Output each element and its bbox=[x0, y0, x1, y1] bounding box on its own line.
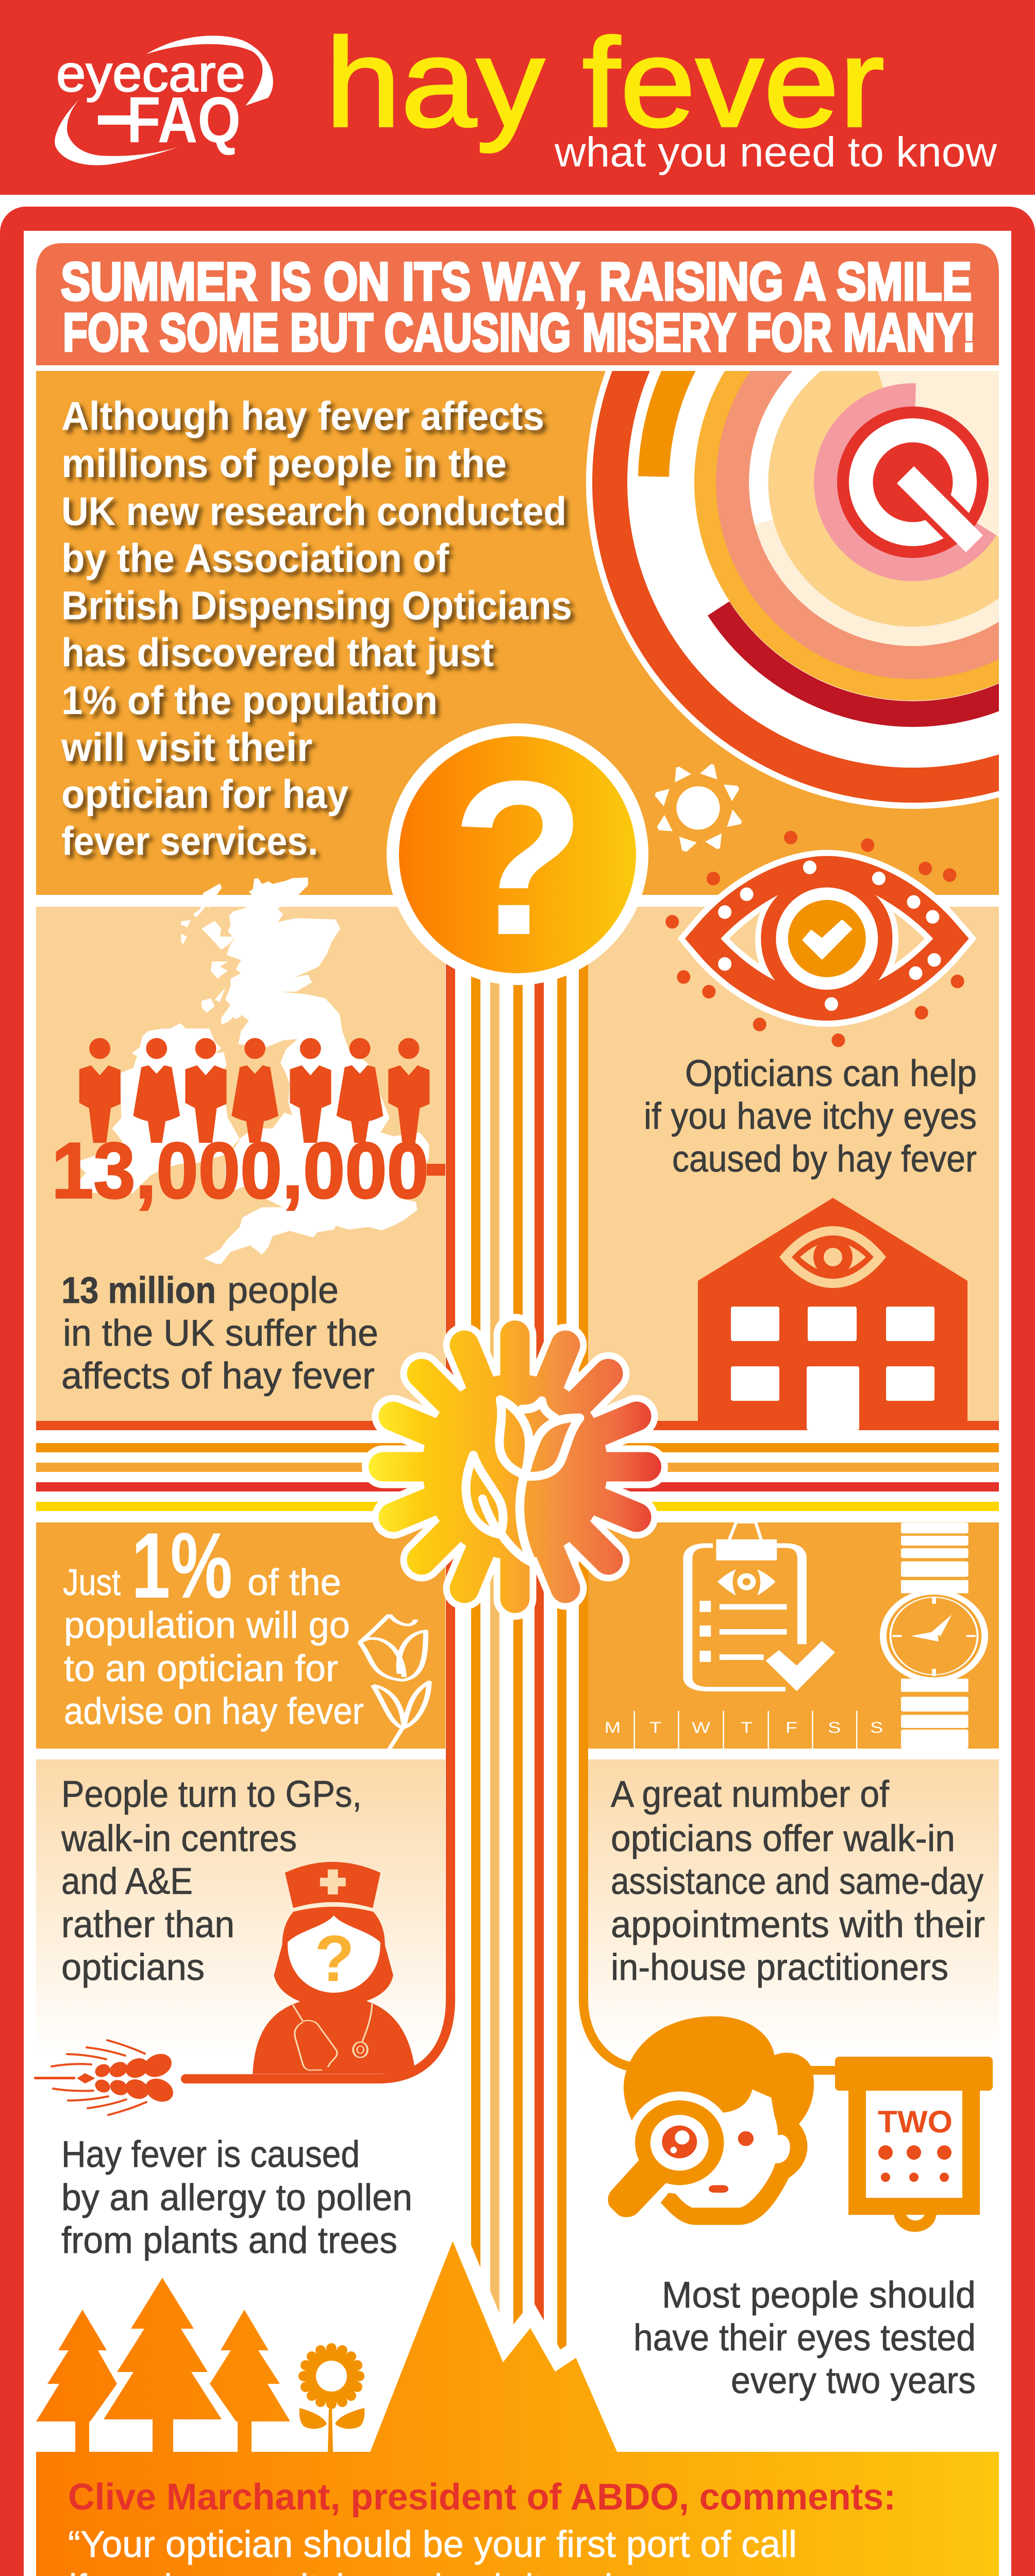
vertical stripes bbox=[186, 958, 630, 2370]
text: 13 million: 13 million bbox=[61, 1270, 216, 1311]
intro paragraph: will visit their bbox=[61, 724, 312, 770]
text: just 1%: Just bbox=[63, 1562, 121, 1603]
title: hay fever bbox=[325, 12, 884, 153]
people row bbox=[79, 1038, 429, 1143]
icon: head with magnifying glass bbox=[608, 2016, 814, 2225]
intro paragraph: optician for hay bbox=[61, 771, 348, 817]
text: people turn to GPs: rather than bbox=[61, 1904, 235, 1945]
trees bbox=[36, 2278, 290, 2452]
question mark badge bbox=[387, 723, 648, 985]
UK map bbox=[75, 877, 429, 1264]
quote text: “Your optician should be your first port of call bbox=[68, 2524, 797, 2565]
icon: eye chart bbox=[835, 2057, 993, 2232]
text: people turn to GPs: People turn to GPs, bbox=[61, 1774, 362, 1815]
icon: sunflower bbox=[299, 2348, 364, 2452]
text: hay fever is caused: by an allergy to pollen bbox=[61, 2177, 412, 2218]
days of the week: T bbox=[649, 1719, 661, 1737]
text: people turn to GPs bbox=[61, 1774, 362, 1988]
text: walk-in assistance: in-house practitioners bbox=[611, 1947, 948, 1988]
text: 13 million: people bbox=[227, 1270, 339, 1311]
days of the week: S bbox=[870, 1719, 883, 1737]
text: people turn to GPs: and A&E bbox=[61, 1861, 193, 1902]
text: 13 million: affects of hay fever bbox=[61, 1355, 375, 1397]
icon: sun and eye bbox=[655, 764, 977, 1047]
connector bar bbox=[427, 1164, 447, 1176]
header band bbox=[0, 0, 1035, 195]
text: walk-in assistance: opticians offer walk-in bbox=[611, 1818, 955, 1859]
intro paragraph: by the Association of bbox=[61, 535, 449, 581]
days of the week: M bbox=[605, 1719, 621, 1737]
days of the week: T bbox=[741, 1719, 753, 1737]
icon: wheat bbox=[34, 2040, 177, 2115]
section 2 background bbox=[36, 907, 999, 1421]
target rings with Q logo bbox=[586, 371, 999, 809]
text: opticians can help: Opticians can help bbox=[685, 1053, 977, 1094]
icon: tulip bbox=[466, 1400, 580, 1563]
question mark badge: ? bbox=[452, 735, 586, 981]
logo: eyecare FAQ: FAQ bbox=[127, 83, 241, 156]
days of the week bbox=[605, 1711, 883, 1749]
intro paragraph: UK new research conducted bbox=[61, 488, 566, 534]
subtitle: what you need to know bbox=[554, 129, 997, 176]
text: eye test every two years: Most people should bbox=[662, 2275, 976, 2316]
text: opticians can help: if you have itchy eyes bbox=[644, 1096, 977, 1137]
text: walk-in assistance: assistance and same-day bbox=[611, 1861, 983, 1902]
banner heading bbox=[36, 243, 999, 365]
days of the week: S bbox=[828, 1719, 841, 1737]
icon: small tulip bbox=[360, 1615, 429, 1749]
section 3 icons bbox=[360, 1522, 988, 1749]
icon: sun bbox=[655, 764, 742, 852]
text: walk-in assistance: appointments with their bbox=[611, 1904, 985, 1945]
text: 13 million bbox=[61, 1270, 378, 1397]
days of the week: F bbox=[786, 1719, 797, 1737]
icon: clipboard with eye bbox=[688, 1522, 835, 1691]
section 3 background bbox=[36, 1522, 999, 1749]
intro paragraph bbox=[61, 393, 572, 863]
text: just 1%: 1% bbox=[131, 1514, 232, 1618]
nurse question mark: ? bbox=[315, 1922, 354, 1995]
text: 13 million: in the UK suffer the bbox=[63, 1313, 378, 1354]
flower badge bbox=[383, 1335, 646, 1598]
logo: eyecare FAQ: eyecare bbox=[56, 45, 245, 103]
icon: wristwatch bbox=[880, 1522, 988, 1749]
section divider bbox=[36, 895, 999, 907]
text: just 1%: to an optician for bbox=[64, 1648, 338, 1689]
section 1 background bbox=[36, 371, 999, 895]
text: hay fever is caused: Hay fever is caused bbox=[61, 2134, 360, 2175]
intro paragraph: 1% of the population bbox=[61, 677, 438, 723]
text: people turn to GPs: opticians bbox=[61, 1947, 205, 1988]
intro paragraph: has discovered that just bbox=[61, 630, 494, 675]
mountains bbox=[370, 2241, 617, 2452]
text: opticians can help: caused by hay fever bbox=[672, 1139, 977, 1180]
text: hay fever is caused bbox=[61, 2134, 412, 2261]
icon: eye with tick bbox=[665, 831, 977, 1047]
text: eye test every two years bbox=[633, 2275, 976, 2401]
text: eye test every two years: have their eyes tested bbox=[633, 2317, 976, 2359]
intro paragraph: Although hay fever affects bbox=[61, 393, 544, 438]
text: walk-in assistance: A great number of bbox=[611, 1774, 890, 1815]
section 4 background bbox=[36, 1759, 999, 2056]
quote attribution: Clive Marchant, president of ABDO, comments: bbox=[68, 2477, 896, 2518]
number 13,000,000: 13,000,000 bbox=[52, 1126, 429, 1215]
intro paragraph: millions of people in the bbox=[61, 440, 507, 486]
intro paragraph: fever services. bbox=[61, 818, 318, 863]
text: just 1%: population will go bbox=[64, 1605, 350, 1646]
quote panel background bbox=[36, 2452, 999, 2576]
text: eye test every two years: every two years bbox=[731, 2360, 976, 2401]
icon: eye chart: TWO bbox=[878, 2105, 953, 2139]
icon: nurse bbox=[253, 1862, 415, 2074]
text: people turn to GPs: walk-in centres bbox=[61, 1818, 297, 1859]
text: opticians can help bbox=[644, 1053, 977, 1180]
text: walk-in assistance bbox=[611, 1774, 985, 1988]
logo: eyecare FAQ bbox=[55, 36, 273, 165]
text: just 1% bbox=[63, 1514, 364, 1732]
house with eye bbox=[698, 1198, 967, 1430]
colour bands bbox=[36, 1421, 999, 1511]
days of the week: W bbox=[692, 1719, 711, 1737]
intro paragraph: British Dispensing Opticians bbox=[61, 583, 572, 628]
connector bar bbox=[809, 2066, 836, 2075]
text: just 1%: advise on hay fever bbox=[64, 1691, 364, 1732]
text: hay fever is caused: from plants and trees bbox=[61, 2220, 397, 2261]
text: just 1%: of the bbox=[247, 1562, 341, 1603]
